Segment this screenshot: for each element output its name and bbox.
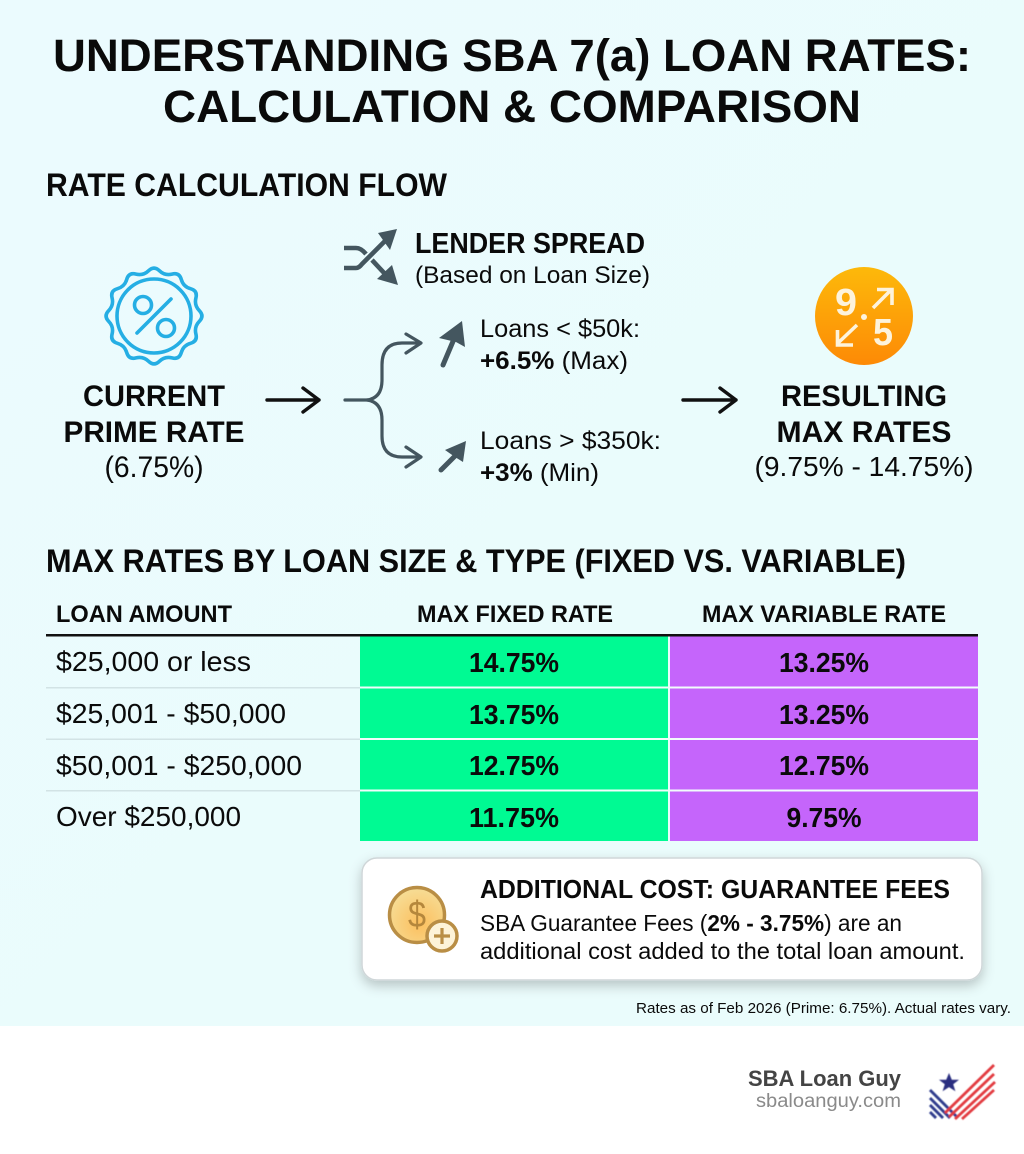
- row: 25,000 or less: 14.75%: [469, 647, 559, 678]
- label: current prime rate: CURRENT: [83, 380, 225, 413]
- heading: max rates by loan size: MAX RATES BY LOAN SIZE & TYPE (FIXED VS. VARIABLE): [46, 543, 906, 579]
- label: resulting max rates: (9.75% - 14.75%): [754, 451, 974, 482]
- row: 25,001-50,000: 13.25%: [779, 699, 869, 730]
- row: 25,001-50,000: [56, 698, 869, 730]
- footer brand: [748, 1066, 902, 1112]
- row: over 250,000: [56, 801, 862, 833]
- small-loan spread text: +6.5% (Max): [480, 347, 628, 375]
- row: 25,001-50,000: 13.75%: [469, 699, 559, 730]
- label: resulting max rates: [754, 380, 974, 482]
- callout heading: ADDITIONAL COST: GUARANTEE FEES: [480, 874, 950, 904]
- small-loan spread text: [480, 315, 640, 375]
- row: 50,001-250,000: [56, 750, 869, 781]
- row: 25,000 or less: [56, 646, 869, 678]
- branch arrows: [345, 334, 421, 467]
- table header: MAX VARIABLE RATE: [702, 601, 946, 628]
- heading: rate calculation flow: RATE CALCULATION FLOW: [46, 167, 448, 203]
- variable rate column fill: [670, 636, 978, 841]
- row: 50,001-250,000: 12.75%: [779, 750, 869, 781]
- row: 25,000 or less: 13.25%: [779, 647, 869, 678]
- footer brand: SBA Loan Guy: [748, 1066, 902, 1091]
- footnote: Rates as of Feb 2026 (Prime: 6.75%). Actual rates vary.: [636, 1000, 1011, 1017]
- icon: shuffle arrows: [344, 229, 398, 285]
- title: UNDERSTANDING SBA 7(a) LOAN RATES:: [53, 30, 971, 81]
- icon: orange rate badge: 9: [835, 282, 857, 324]
- large-loan spread text: [480, 427, 661, 487]
- title: [53, 30, 971, 132]
- title: CALCULATION & COMPARISON: [163, 81, 861, 132]
- callout body: additional cost added to the total loan amount.: [480, 938, 965, 964]
- icon: coin plus: $: [408, 894, 426, 935]
- large-loan spread text: +3% (Min): [480, 459, 599, 487]
- large-loan spread text: Loans > $350k:: [480, 427, 661, 455]
- icon: orange rate badge: 5: [873, 312, 893, 354]
- row: over 250,000: Over $250,000: [56, 801, 241, 832]
- row: 25,000 or less: $25,000 or less: [56, 646, 251, 677]
- icon: small up arrow: [441, 441, 466, 470]
- arrow: prime to spread: [267, 388, 319, 412]
- label: current prime rate: PRIME RATE: [64, 416, 244, 449]
- label: current prime rate: (6.75%): [104, 451, 204, 484]
- small-loan spread text: Loans < $50k:: [480, 315, 640, 343]
- footer brand: sbaloanguy.com: [756, 1091, 901, 1112]
- lender spread label: LENDER SPREAD: [415, 228, 645, 260]
- icon: coin plus: [390, 888, 457, 951]
- icon: large up arrow: [439, 321, 465, 365]
- table: max rates: [46, 601, 978, 841]
- callout: guarantee fees: [362, 858, 982, 980]
- row: 50,001-250,000: 12.75%: [469, 750, 559, 781]
- row: over 250,000: 11.75%: [469, 802, 559, 833]
- lender spread label: (Based on Loan Size): [415, 262, 650, 289]
- table header: [56, 601, 946, 628]
- table header: LOAN AMOUNT: [56, 601, 232, 628]
- label: current prime rate: [64, 380, 244, 484]
- callout body: SBA Guarantee Fees (2% - 3.75%) are an: [480, 910, 902, 936]
- row: 25,001-50,000: $25,001 - $50,000: [56, 698, 286, 729]
- icon: orange rate badge: [815, 267, 913, 365]
- row: over 250,000: 9.75%: [786, 802, 862, 833]
- lender spread label: [415, 228, 650, 289]
- table header: MAX FIXED RATE: [417, 601, 613, 628]
- row: 50,001-250,000: $50,001 - $250,000: [56, 750, 302, 781]
- callout body: [480, 910, 965, 964]
- fixed rate column fill: [360, 636, 668, 841]
- icon: flag check logo: [930, 1065, 995, 1119]
- label: resulting max rates: MAX RATES: [776, 416, 952, 449]
- icon: percent badge: [106, 268, 202, 364]
- label: resulting max rates: RESULTING: [781, 380, 947, 413]
- arrow: spread to result: [683, 388, 736, 412]
